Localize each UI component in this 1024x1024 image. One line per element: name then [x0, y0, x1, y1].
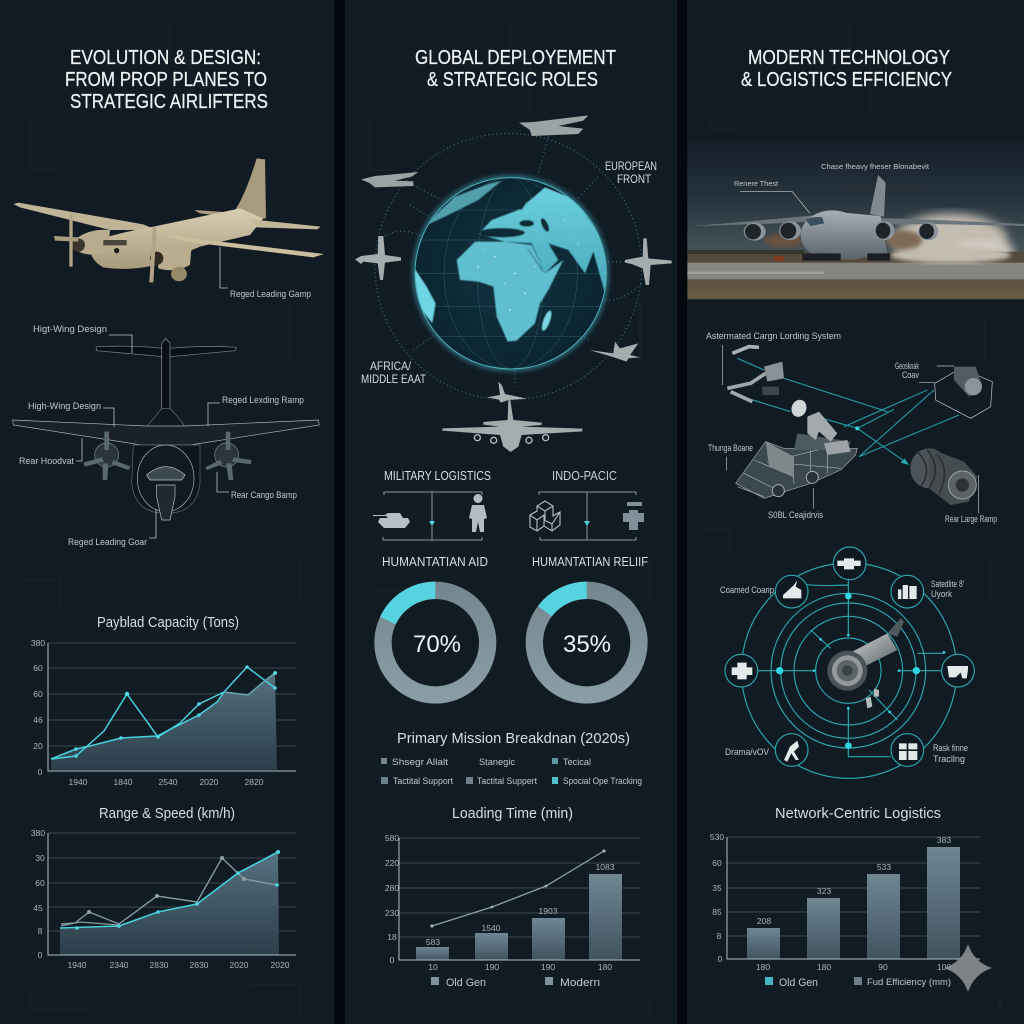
legend: primary mission breakdown: Shsegr Allalt [392, 757, 449, 767]
heading: global deployment [415, 47, 616, 91]
callouts: blueprint plane labels: High-Wing Design [28, 401, 101, 411]
chart: network-centric logistics bar chart: 35 [712, 883, 722, 893]
block: military logistics: MILITARY LOGISTICS [384, 469, 491, 483]
heading: modern technology: & LOGISTICS EFFICIENCY [741, 69, 952, 91]
diagram: network-centric radial: Uyork [931, 589, 952, 599]
donut chart: 70 percent [383, 590, 488, 695]
loader body [736, 442, 857, 498]
chart: loading time bar chart: Modern [560, 977, 600, 989]
chart: loading time bar chart: Loading Time (min) [452, 805, 573, 822]
heading: modern technology [741, 47, 952, 91]
icon: plane below globe [487, 382, 527, 403]
chart: network-centric logistics bar chart: 208 [757, 916, 771, 926]
block: indo-pacific: INDO-PACIC [552, 469, 617, 483]
chart: loading time bar chart: Old Gen [446, 977, 486, 989]
chart: loading time bar chart: 230 [385, 908, 399, 918]
heading: global deployment: GLOBAL DEPLOYEMENT [415, 47, 616, 69]
chart: network-centric logistics bar chart: 90 [878, 962, 888, 972]
icon: sparkle watermark [944, 944, 992, 992]
labels: photo captions: Renere Thest [734, 179, 779, 188]
icon: plane upper left [361, 172, 418, 187]
heading: evolution and design: STRATEGIC AIRLIFTERS [70, 91, 268, 113]
chart: range and speed line chart: 8 [38, 926, 43, 936]
chart: network-centric logistics bar chart: 60 [712, 858, 722, 868]
chart: loading time bar chart: 1083 [596, 862, 615, 872]
chart: payload capacity line chart: 1840 [114, 777, 133, 787]
label: humanitarian aid: HUMANTATIAN AID [382, 554, 488, 569]
chart: loading time bar chart: 190 [541, 962, 555, 972]
chart: loading time bar chart: 10 [428, 962, 438, 972]
icon: plane top [519, 115, 588, 136]
legend: primary mission breakdown: Spocial Ope Tracking [563, 776, 642, 786]
icon: soldier figure [469, 494, 487, 532]
chart: range and speed line chart: 2630 [190, 960, 209, 970]
chart: payload capacity line chart: 2540 [159, 777, 178, 787]
donut value: 35 percent: 35% [563, 631, 611, 658]
legend: primary mission breakdown: Tactital Support [393, 776, 453, 786]
diagram: network-centric radial: Satedlite 8' [931, 579, 964, 589]
chart: loading time bar chart: 583 [426, 937, 440, 947]
diagram: automated cargo loading system: Thunga Boane [708, 443, 753, 453]
illustration: vintage propeller transport plane [13, 158, 324, 282]
icon: medical cross [623, 502, 644, 530]
legend: primary mission breakdown: Tecical [563, 757, 591, 767]
icon: plane right [625, 238, 672, 285]
label: european front: EUROPEAN [605, 159, 657, 173]
chart: range and speed line chart: Range & Speed (km/h) [99, 805, 235, 822]
chart: range and speed line chart: 2020 [230, 960, 249, 970]
diagram: network-centric radial [720, 547, 974, 778]
chart: range and speed line chart [31, 805, 296, 970]
camera housing [935, 368, 992, 418]
chart: loading time bar chart: 18 [387, 932, 397, 942]
diagram: automated cargo loading system: Astermated Cargn Lording System [706, 331, 841, 341]
chart: payload capacity line chart: 60 [33, 689, 43, 699]
icon: tank [373, 513, 410, 528]
chart: network-centric logistics bar chart [710, 805, 980, 989]
chart: network-centric logistics bar chart: 180 [817, 962, 831, 972]
central sensor turret [852, 633, 897, 667]
label: africa and middle east [361, 359, 427, 386]
diagram: automated cargo loading system: Rear Large Ramp [945, 514, 997, 524]
chart: range and speed line chart: 45 [33, 903, 43, 913]
labels: photo captions [734, 162, 930, 188]
heading: evolution and design [65, 47, 268, 113]
callout: ramp label on vintage plane: Reged Leading Gamp [230, 289, 311, 299]
chart: payload capacity line chart: Payblad Capacity (Tons) [97, 614, 239, 631]
chart: range and speed line chart: 2020 [271, 960, 290, 970]
legend: primary mission breakdown: Tactital Suppert [477, 776, 537, 786]
chart: network-centric logistics bar chart: Old Gen [779, 977, 818, 989]
block: military logistics [373, 469, 491, 540]
chart: loading time bar chart: 1903 [539, 906, 558, 916]
legend: primary mission breakdown: Primary Mission Breakdnan (2020s) [397, 730, 630, 747]
block: indo-pacific [530, 469, 636, 540]
label: humanitarian relief: HUMANTATIAN RELIIF [532, 554, 648, 569]
label: africa and middle east: AFRICA/ [370, 359, 412, 373]
heading: modern technology: MODERN TECHNOLOGY [748, 47, 950, 69]
chart: payload capacity line chart: 380 [31, 638, 45, 648]
heading: global deployment: & STRATEGIC ROLES [427, 69, 598, 91]
chart: network-centric logistics bar chart: 383 [937, 835, 951, 845]
chart: range and speed line chart: 1940 [68, 960, 87, 970]
diagram: automated cargo loading system: S0BL Ceajidrvis [768, 510, 823, 520]
chart: payload capacity line chart: 1940 [69, 777, 88, 787]
chart: network-centric logistics bar chart: 323 [817, 886, 831, 896]
chart: loading time bar chart: 190 [485, 962, 499, 972]
icon: plane left [355, 236, 401, 280]
chart: range and speed line chart: 30 [35, 853, 45, 863]
diagram: network-centric radial: Coamed Coanp [720, 585, 774, 595]
chart: network-centric logistics bar chart: 8 [717, 931, 722, 941]
illustration: C-17 airlifter on dusty runway [687, 140, 1024, 299]
callouts: blueprint plane labels: Reged Lexding Ramp [222, 395, 304, 405]
chart: loading time bar chart [385, 805, 640, 989]
chart: network-centric logistics bar chart: 533 [877, 862, 891, 872]
turbine [910, 448, 948, 488]
callouts: blueprint plane labels: Rear Hoodvat [19, 456, 74, 466]
chart: network-centric logistics bar chart: 180 [756, 962, 770, 972]
chart: range and speed line chart: 2340 [110, 960, 129, 970]
labels: photo captions: Chase fheavy fheser Blonabevit [821, 162, 930, 171]
chart: payload capacity line chart: 2020 [200, 777, 219, 787]
chart: network-centric logistics bar chart: Network-Centric Logistics [775, 805, 941, 822]
chart: range and speed line chart: 0 [38, 950, 43, 960]
chart: network-centric logistics bar chart: 100 [937, 962, 951, 972]
chart: range and speed line chart: 380 [31, 828, 45, 838]
callouts: blueprint plane labels: Rear Cango Bamp [231, 490, 297, 500]
diagram: network-centric radial: Rask finne [933, 743, 968, 753]
legend: primary mission breakdown: Stanegic [479, 757, 516, 767]
panel: evolution and design [0, 0, 334, 1024]
diagram: network-centric radial: Tracllng [933, 754, 965, 764]
icon: fighter lower right [589, 342, 640, 362]
chart: loading time bar chart: 280 [385, 883, 399, 893]
node icons [732, 558, 968, 762]
legend: primary mission breakdown [381, 730, 642, 786]
chart: loading time bar chart: 1540 [482, 923, 501, 933]
chart: network-centric logistics bar chart: 530 [710, 832, 724, 842]
chart: range and speed line chart: 2830 [150, 960, 169, 970]
callouts: blueprint plane labels: Reged Leading Goar [68, 537, 147, 547]
callouts: blueprint plane labels [19, 324, 304, 547]
chart: network-centric logistics bar chart: 0 [718, 954, 723, 964]
icon: cargo boxes [530, 501, 560, 531]
diagram: automated cargo loading system: Geosknak [895, 361, 919, 371]
chart: network-centric logistics bar chart: 85 [712, 907, 722, 917]
heading: evolution and design: EVOLUTION & DESIGN: [70, 47, 261, 69]
panel: global deployment [345, 0, 677, 1024]
label: european front [605, 159, 657, 186]
chart: payload capacity line chart: 0 [38, 767, 43, 777]
chart: payload capacity line chart: 60 [33, 663, 43, 673]
chart: payload capacity line chart [31, 614, 296, 787]
heading: evolution and design: FROM PROP PLANES TO [65, 69, 267, 91]
label: africa and middle east: MIDDLE EAAT [361, 372, 427, 386]
illustration: glowing globe with orbit paths [375, 133, 642, 400]
diagram: automated cargo loading system: Coav [902, 370, 919, 380]
robot arm upper [732, 347, 759, 353]
donut value: 70 percent: 70% [413, 631, 461, 658]
chart: loading time bar chart: 0 [390, 955, 395, 965]
icon: large transport plane [442, 400, 582, 452]
chart: payload capacity line chart: 2820 [245, 777, 264, 787]
callout: ramp label on vintage plane [220, 247, 311, 299]
panel: modern technology [687, 0, 1024, 1024]
network nodes [725, 547, 974, 766]
chart: payload capacity line chart: 20 [33, 741, 43, 751]
chart: payload capacity line chart: 46 [33, 715, 43, 725]
donut chart: 35 percent [534, 590, 639, 695]
chart: range and speed line chart: 60 [35, 878, 45, 888]
label: european front: FRONT [617, 172, 652, 186]
diagram: network-centric radial: Drama/vOV [725, 747, 769, 757]
illustration: blueprint front view of plane [13, 338, 319, 520]
chart: network-centric logistics bar chart: Fud Efficiency (mm) [867, 977, 951, 987]
diagram: automated cargo loading system [706, 331, 997, 524]
chart: loading time bar chart: 180 [598, 962, 612, 972]
chart: loading time bar chart: 220 [385, 858, 399, 868]
chart: loading time bar chart: 580 [385, 833, 399, 843]
callouts: blueprint plane labels: Higt-Wing Design [33, 324, 107, 334]
